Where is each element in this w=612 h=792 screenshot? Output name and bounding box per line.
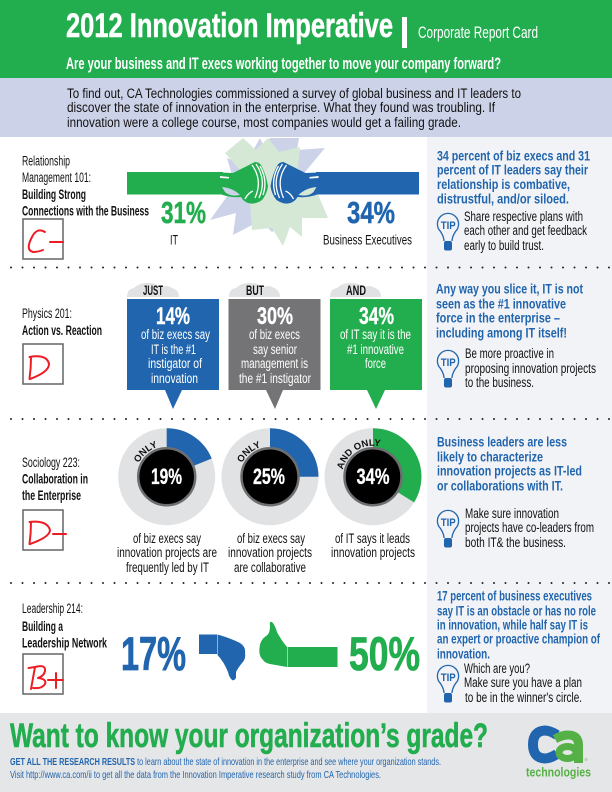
finding 3: likely to characterize xyxy=(437,448,543,464)
subtitle: report card: Corporate Report Card xyxy=(418,24,538,42)
callout: just 14% xyxy=(127,283,219,409)
finding 4: innovation. xyxy=(437,646,490,662)
donut chart: 25%: are collaborative xyxy=(234,560,306,575)
tip text 4 xyxy=(464,661,582,705)
section: leadership xyxy=(22,601,420,694)
icon: tip bulb xyxy=(437,213,459,250)
tip text 2: Be more proactive in xyxy=(465,346,554,361)
tip text 1: early to build trust. xyxy=(464,238,544,253)
donut chart: 34%: of IT says it leads xyxy=(335,531,410,546)
section: relationship management xyxy=(22,138,419,259)
callout: just 14%: innovation xyxy=(151,371,198,386)
callout: and 34%: #1 innovative xyxy=(347,342,404,357)
title: 2012 Innovation Imperative xyxy=(66,7,393,45)
icon: tip bulb xyxy=(437,665,459,702)
panel: header xyxy=(0,0,612,78)
icon: tip bulb xyxy=(437,510,459,548)
finding 1: relationship is combative, xyxy=(437,176,570,192)
tip text 3: both IT& the business. xyxy=(465,535,566,550)
course label: Building Strong xyxy=(22,187,86,202)
course label: Action vs. Reaction xyxy=(22,323,102,338)
footer text: Visit http://www.ca.com/ii to get all the data from the Innovation Imperative research study from CA Technologies. xyxy=(10,769,381,781)
donut chart: 19%: ONLY xyxy=(134,440,156,462)
icon: tip bulb xyxy=(437,350,459,388)
finding 3 xyxy=(437,434,582,494)
finding 3: Business leaders are less xyxy=(437,434,567,450)
icon: tip bulb: TIP xyxy=(441,357,456,369)
course label: Management 101: xyxy=(22,170,91,185)
donut chart: 25%: ONLY xyxy=(238,441,259,462)
course label: Building a xyxy=(22,619,63,634)
donut chart: 25%: 25% xyxy=(253,464,285,489)
callout: just 14%: JUST xyxy=(143,283,163,298)
stat: 34% business executives: 34% xyxy=(347,195,395,230)
callout: and 34%: AND xyxy=(346,283,366,298)
course label: Sociology 223: xyxy=(22,455,80,470)
course label xyxy=(22,154,149,218)
icon: tip bulb: TIP xyxy=(441,220,456,232)
grade box C- xyxy=(23,219,63,259)
tip text 3 xyxy=(465,506,594,550)
panel: footer xyxy=(0,713,612,792)
logo: CA technologies: technologies xyxy=(526,766,591,780)
donut chart: 34%: innovation projects xyxy=(331,545,415,560)
footer text: GET ALL THE RESEARCH RESULTS to learn about the state of innovation in the enterprise and see where your organization stands. xyxy=(10,756,441,768)
donut chart: 34% xyxy=(324,428,422,560)
stat: 34% business executives xyxy=(323,195,412,248)
callout: but 30%: management is xyxy=(241,356,308,371)
icon: thumbs up xyxy=(259,622,338,667)
course label: Leadership Network xyxy=(22,636,107,650)
donut chart: 34%: 34% xyxy=(356,464,390,489)
callout: but 30%: the #1 instigator xyxy=(239,371,311,386)
callout: just 14%: of biz execs say xyxy=(141,327,210,342)
course label xyxy=(22,306,102,338)
panel: tip 3 xyxy=(437,434,594,550)
course label: Leadership 214: xyxy=(22,601,83,616)
donut chart: 25%: of biz execs say xyxy=(237,531,305,546)
callout: just 14%: IT is the #1 xyxy=(151,342,196,357)
panel: tip 4 xyxy=(437,588,600,705)
course label: Collaboration in xyxy=(22,472,88,486)
stat: 17%: 17% xyxy=(121,627,186,680)
callout: but 30%: 30% xyxy=(257,303,293,330)
starburst xyxy=(210,138,328,246)
icon: blue fist with bar xyxy=(270,162,419,204)
grade box D xyxy=(23,344,63,384)
intro text: To find out, CA Technologies commissioned a survey of global business and IT leaders to xyxy=(67,86,521,101)
section: sociology xyxy=(22,428,422,575)
panel: tip 1 xyxy=(437,148,590,253)
stat: 34% business executives: Business Executives xyxy=(323,232,412,248)
callout: and 34%: 34% xyxy=(359,303,394,330)
callout: and 34%: force xyxy=(365,356,386,371)
tip text 2 xyxy=(465,346,596,390)
finding 1: distrustful, and/or siloed. xyxy=(437,190,569,206)
panel: tip 2 xyxy=(436,280,596,390)
stat: 31% IT: 31% xyxy=(161,195,206,230)
intro text xyxy=(67,86,521,130)
grade box B+ xyxy=(23,654,63,694)
callout: just 14%: 14% xyxy=(156,303,190,330)
finding 1 xyxy=(437,148,590,206)
donut chart: 19%: 19% xyxy=(151,464,182,489)
finding 2: seen as the #1 innovative xyxy=(436,296,566,312)
icon: tip bulb: TIP xyxy=(441,672,456,684)
donut chart: 19%: of biz execs say xyxy=(133,531,201,546)
donut chart: 19%: frequently led by IT xyxy=(126,560,209,575)
course label xyxy=(22,601,107,650)
donut chart: 34%: AND ONLY xyxy=(337,439,381,470)
finding 2: force in the enterprise – xyxy=(436,310,560,326)
course label: Physics 201: xyxy=(22,306,72,321)
footer text xyxy=(10,756,441,781)
donut chart: 25% xyxy=(222,428,318,575)
donut chart: 25%: innovation projects xyxy=(228,545,312,560)
icon: tip bulb: TIP xyxy=(441,517,456,529)
logo: CA technologies: ® xyxy=(584,757,588,762)
course label: the Enterprise xyxy=(22,488,81,503)
callout: but 30% xyxy=(228,283,320,409)
callout: but 30%: BUT xyxy=(246,283,264,298)
callout: but 30%: say senior xyxy=(253,342,297,357)
callout: but 30%: of biz execs xyxy=(249,327,300,342)
stat: 31% IT: IT xyxy=(170,232,178,248)
intro text: discover the state of innovation in the enterprise. What they found was troubling. If xyxy=(67,100,495,115)
finding 4 xyxy=(437,588,600,662)
finding 2 xyxy=(436,280,583,340)
icon: green fist with bar xyxy=(127,162,268,204)
callout: just 14%: instigator of xyxy=(148,356,202,371)
tip text 2: to the business. xyxy=(465,375,534,390)
panel: intro xyxy=(0,78,612,137)
callout: and 34%: of IT say it is the xyxy=(340,327,411,342)
course label xyxy=(22,455,88,503)
title divider xyxy=(402,17,407,48)
tip text 4: Which are you? xyxy=(464,661,530,676)
callout: and 34% xyxy=(330,283,422,409)
stat: 50%: 50% xyxy=(349,627,420,680)
donut chart: 19%: innovation projects are xyxy=(117,545,217,560)
tip text 1 xyxy=(464,209,587,253)
finding 3: or collaborations with IT. xyxy=(437,478,563,494)
section: physics xyxy=(22,283,422,409)
icon: thumbs down xyxy=(199,634,245,680)
course label: Connections with the Business xyxy=(22,204,149,218)
finding 2: including among IT itself! xyxy=(436,324,567,340)
logo: CA technologies xyxy=(526,730,591,780)
course label: Relationship xyxy=(22,154,70,168)
stat: 31% IT xyxy=(161,195,206,248)
tip text 3: Make sure innovation xyxy=(465,506,559,521)
donut chart: 19% xyxy=(117,428,217,575)
panel: right tips column background xyxy=(427,137,612,714)
intro text: innovation were a college course, most companies would get a failing grade. xyxy=(67,115,461,130)
grade box D- xyxy=(23,510,66,550)
